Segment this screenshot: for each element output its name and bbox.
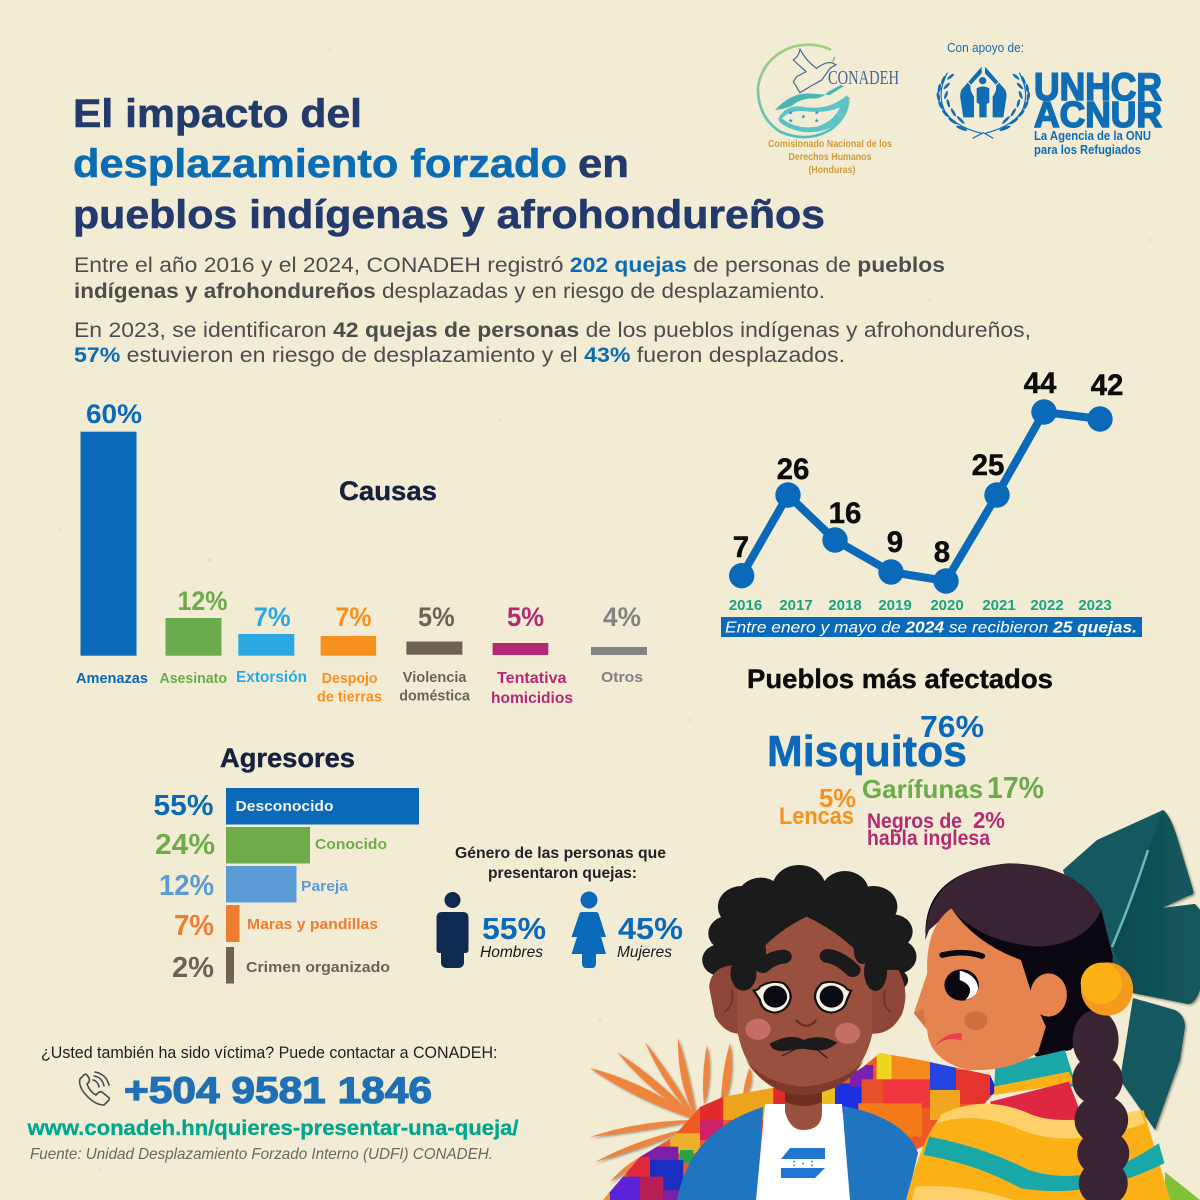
- bar: violencia domestica 5%: [399, 602, 471, 705]
- logo: CONADEH: ★: [788, 110, 793, 117]
- nose and cheeks: [745, 1019, 860, 1044]
- title: pueblos indígenas y afrohondureños: [73, 193, 825, 237]
- flag: [781, 1148, 825, 1178]
- bar: tentativa homicidios 5%: [491, 602, 573, 707]
- bar: pareja 12%: Pareja: [301, 878, 349, 895]
- bar: otros 4%: 4%: [603, 602, 641, 632]
- icon: mujer: [572, 892, 606, 968]
- bar: violencia domestica 5%: doméstica: [399, 688, 471, 705]
- bar: despojo de tierras 7%: Despojo: [322, 670, 378, 687]
- woman: [906, 863, 1170, 1200]
- panel: pueblos más afectados: Pueblos más afectados: [747, 664, 1053, 694]
- bar: amenazas 60%: 60%: [86, 399, 142, 429]
- text: hombres 55%: Hombres: [480, 944, 543, 961]
- panel: pueblos más afectados: habla inglesa: [867, 827, 990, 850]
- bar: despojo de tierras 7%: [317, 602, 382, 706]
- line chart: quejas por año: 26: [777, 453, 809, 486]
- bar: tentativa homicidios 5%: homicidios: [491, 690, 573, 707]
- bar: tentativa homicidios 5%: Tentativa: [497, 670, 567, 687]
- bar: asesinato 12%: 12%: [178, 586, 228, 616]
- intro text: 57% estuvieron en riesgo de desplazamiento y el 43% fueron desplazados.: [74, 344, 845, 367]
- title: El impacto del: [73, 92, 362, 136]
- logo: UNHCR ACNUR: La Agencia de la ONU: [1034, 129, 1151, 143]
- line chart: quejas por año: 2020: [930, 597, 964, 614]
- panel: pueblos más afectados: 17%: [987, 770, 1044, 805]
- bar: crimen organizado 2%: [172, 947, 390, 984]
- line chart: quejas por año: 2017: [779, 597, 813, 614]
- orange palm: [590, 1038, 751, 1182]
- intro text: En 2023, se identificaron 42 quejas de personas de los pueblos indígenas y afrohondureños,: [74, 319, 1031, 342]
- bar: crimen organizado 2%: 2%: [172, 952, 214, 984]
- bar: maras y pandillas 7%: 7%: [174, 910, 214, 942]
- intro text: Entre el año 2016 y el 2024, CONADEH registró 202 quejas de personas de pueblos: [74, 254, 945, 277]
- bar: despojo de tierras 7%: de tierras: [317, 689, 382, 706]
- hair back: [702, 865, 916, 1000]
- bar: despojo de tierras 7%: 7%: [336, 602, 372, 632]
- panel: género: [436, 845, 683, 968]
- poncho: [906, 1105, 1170, 1200]
- bar: extorsion 7%: [236, 602, 307, 686]
- bar: pareja 12%: 12%: [159, 870, 214, 902]
- line chart: quejas por año: [721, 367, 1142, 637]
- title: desplazamiento forzado: [73, 142, 567, 186]
- eyebrows: [763, 956, 853, 970]
- logo: CONADEH: ★: [814, 110, 819, 117]
- logo: CONADEH: CONADEH: [828, 67, 899, 89]
- title: en: [578, 142, 629, 186]
- icon: UNHCR emblem: [936, 67, 1031, 138]
- line chart: quejas por año: 2016: [729, 597, 762, 614]
- icon: teléfono: [80, 1072, 109, 1105]
- panel: pueblos más afectados: Negros de: [867, 810, 962, 833]
- line chart: quejas por año: 2021: [982, 597, 1016, 614]
- blouse: [994, 1050, 1076, 1087]
- shawl: [603, 1053, 994, 1200]
- line chart: quejas por año: 2018: [828, 597, 862, 614]
- illustration: personajes: [590, 810, 1200, 1200]
- bar: asesinato 12%: Asesinato: [160, 670, 227, 687]
- logo: UNHCR ACNUR: para los Refugiados: [1034, 143, 1141, 157]
- text: mujeres 45%: Mujeres: [617, 944, 672, 961]
- bar: crimen organizado 2%: Crimen organizado: [246, 959, 390, 976]
- bar chart: agresores: [154, 743, 419, 984]
- bar: amenazas 60%: Amenazas: [76, 670, 148, 687]
- panel: pueblos más afectados: 5%: [819, 783, 856, 813]
- face: [737, 917, 872, 1095]
- panel: pueblos más afectados: [747, 664, 1053, 850]
- intro text: [74, 254, 1031, 367]
- line chart: quejas por año: 8: [934, 536, 950, 569]
- icon: hombre: [436, 892, 468, 968]
- panel: contacto: www.conadeh.hn/quieres-presentar-una-queja/: [26, 1116, 519, 1140]
- panel: contacto: +504 9581 1846: [124, 1070, 432, 1111]
- line chart: quejas por año: 44: [1024, 367, 1057, 400]
- bar: maras y pandillas 7%: [174, 905, 378, 942]
- text: mujeres 45%: 45%: [618, 911, 683, 946]
- neck: [785, 1088, 822, 1130]
- line chart: quejas por año: 9: [887, 526, 903, 559]
- logo: UNHCR ACNUR: Con apoyo de:: [947, 41, 1024, 55]
- bar: otros 4%: [591, 602, 647, 686]
- panel: género: Género de las personas que: [455, 845, 666, 862]
- logo: CONADEH: Comisionado Nacional de los: [768, 139, 892, 150]
- cheek and mouth: [935, 1011, 987, 1046]
- title: [73, 92, 825, 237]
- bar: extorsion 7%: 7%: [254, 602, 291, 632]
- text: hombres 55%: [480, 911, 546, 961]
- panel: género: presentaron quejas:: [488, 865, 637, 882]
- text: hombres 55%: 55%: [482, 911, 546, 946]
- curls: [731, 936, 887, 991]
- ears: [709, 965, 905, 1034]
- bar: violencia domestica 5%: Violencia: [403, 669, 467, 686]
- logo: CONADEH: [758, 45, 899, 176]
- logo: UNHCR ACNUR: ACNUR: [1034, 94, 1162, 135]
- panel: pueblos más afectados: Misquitos: [767, 727, 967, 776]
- panel: contacto: [26, 1043, 519, 1163]
- bar: desconocido 55%: 55%: [154, 790, 214, 822]
- logo: UNHCR ACNUR: UNHCR: [1034, 66, 1162, 109]
- bar: conocido 24%: [155, 827, 387, 864]
- braid: [1072, 1010, 1129, 1200]
- bar: asesinato 12%: [160, 586, 228, 687]
- hair: [925, 863, 1113, 1057]
- line chart: quejas por año: 2019: [878, 597, 912, 614]
- bar: pareja 12%: [159, 866, 349, 902]
- bar: tentativa homicidios 5%: 5%: [507, 602, 544, 632]
- logo: CONADEH: (Honduras): [808, 165, 856, 176]
- line chart: quejas por año: 2022: [1030, 597, 1064, 614]
- panel: pueblos más afectados: Lencas: [779, 803, 854, 830]
- bar: conocido 24%: Conocido: [315, 836, 387, 853]
- jacket: [677, 1106, 918, 1200]
- callout: 2024: Entre enero y mayo de 2024 se recibieron 25 quejas.: [725, 620, 1137, 636]
- heading: causas: Causas: [339, 476, 437, 506]
- text: mujeres 45%: [617, 911, 683, 961]
- hair tie: [1081, 962, 1133, 1016]
- bar: desconocido 55%: [154, 788, 419, 824]
- heading: agresores: Agresores: [220, 743, 355, 773]
- bar: maras y pandillas 7%: Maras y pandillas: [247, 916, 378, 933]
- bar: extorsion 7%: Extorsión: [236, 669, 307, 686]
- intro text: indígenas y afrohondureños desplazadas y en riesgo de desplazamiento.: [74, 280, 825, 303]
- bar: desconocido 55%: Desconocido: [236, 798, 334, 815]
- line chart: quejas por año: 42: [1091, 369, 1123, 402]
- panel: pueblos más afectados: 76%: [920, 709, 984, 744]
- line chart: quejas por año: 7: [733, 531, 749, 564]
- panel: contacto: ¿Usted también ha sido víctima? Puede contactar a CONADEH:: [41, 1043, 498, 1062]
- bar: conocido 24%: 24%: [155, 829, 215, 861]
- leaf: [1063, 810, 1200, 1130]
- panel: pueblos más afectados: 2%: [973, 807, 1005, 833]
- bar: amenazas 60%: [76, 399, 148, 687]
- eye: [944, 969, 979, 1001]
- eyebrow: [943, 953, 982, 956]
- logo: CONADEH: ★: [788, 118, 793, 125]
- face: [914, 908, 1046, 1070]
- logo: CONADEH: Derechos Humanos: [788, 152, 872, 163]
- moustache: [770, 1037, 837, 1058]
- line chart: quejas por año: 25: [972, 449, 1004, 482]
- bar chart: causas: [76, 399, 647, 707]
- bar: violencia domestica 5%: 5%: [418, 602, 455, 632]
- logo: CONADEH: ★: [814, 118, 819, 125]
- panel: contacto: Fuente: Unidad Desplazamiento Forzado Interno (UDFI) CONADEH.: [30, 1146, 493, 1163]
- line chart: quejas por año: 16: [829, 497, 861, 530]
- green textile: [1165, 1172, 1200, 1200]
- line chart: quejas por año: 2023: [1078, 597, 1112, 614]
- shirt: [756, 1104, 850, 1200]
- panel: pueblos más afectados: Garífunas: [862, 774, 983, 804]
- eyes: [754, 982, 851, 1013]
- bar: otros 4%: Otros: [601, 669, 643, 686]
- man: [677, 865, 918, 1200]
- logo: CONADEH: ★: [801, 114, 806, 121]
- logo: UNHCR ACNUR: [936, 41, 1162, 157]
